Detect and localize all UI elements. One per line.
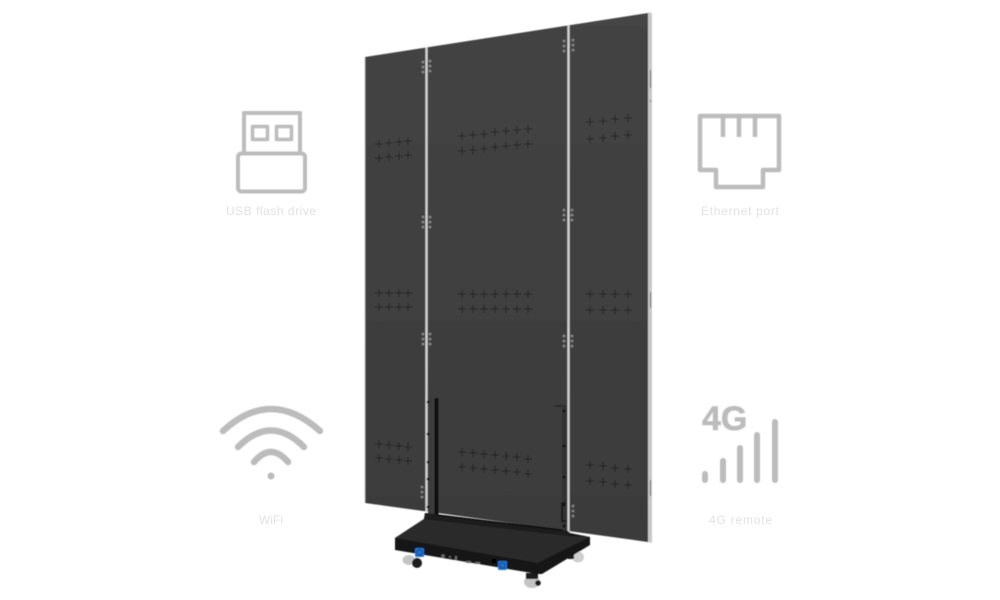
LED display product <box>365 12 652 588</box>
icon: 4G signal <box>702 400 778 483</box>
icon: Ethernet port <box>700 116 779 187</box>
mounting crosses: middle band <box>375 289 632 314</box>
stand: right upright bracket <box>555 405 567 532</box>
blue connector right <box>498 561 507 570</box>
label: Ethernet port: Ethernet port <box>701 204 780 218</box>
base silhouette <box>395 513 590 574</box>
4G heading: 4G <box>702 400 747 438</box>
blue connector left <box>415 548 424 557</box>
base top surface <box>395 519 590 563</box>
base rear lip <box>424 513 570 536</box>
mounting crosses: lower band <box>375 440 632 489</box>
label: WiFi: WiFi <box>259 513 283 527</box>
label: 4G remote: 4G remote <box>709 513 772 527</box>
base power knob <box>492 558 496 564</box>
signal bars <box>702 419 778 483</box>
base ports <box>441 554 480 564</box>
mounting crosses: upper band <box>375 114 632 162</box>
seam latch dots <box>421 39 574 517</box>
panel right edge <box>648 12 652 543</box>
icon: WiFi <box>223 409 320 480</box>
panel seams <box>426 26 568 533</box>
wheels <box>402 551 584 588</box>
stand: left upright bracket <box>427 398 438 516</box>
icon: USB flash drive <box>238 113 305 192</box>
stand: base <box>395 513 590 574</box>
panel: back of display <box>365 13 648 542</box>
label: USB flash drive: USB flash drive <box>226 204 316 218</box>
